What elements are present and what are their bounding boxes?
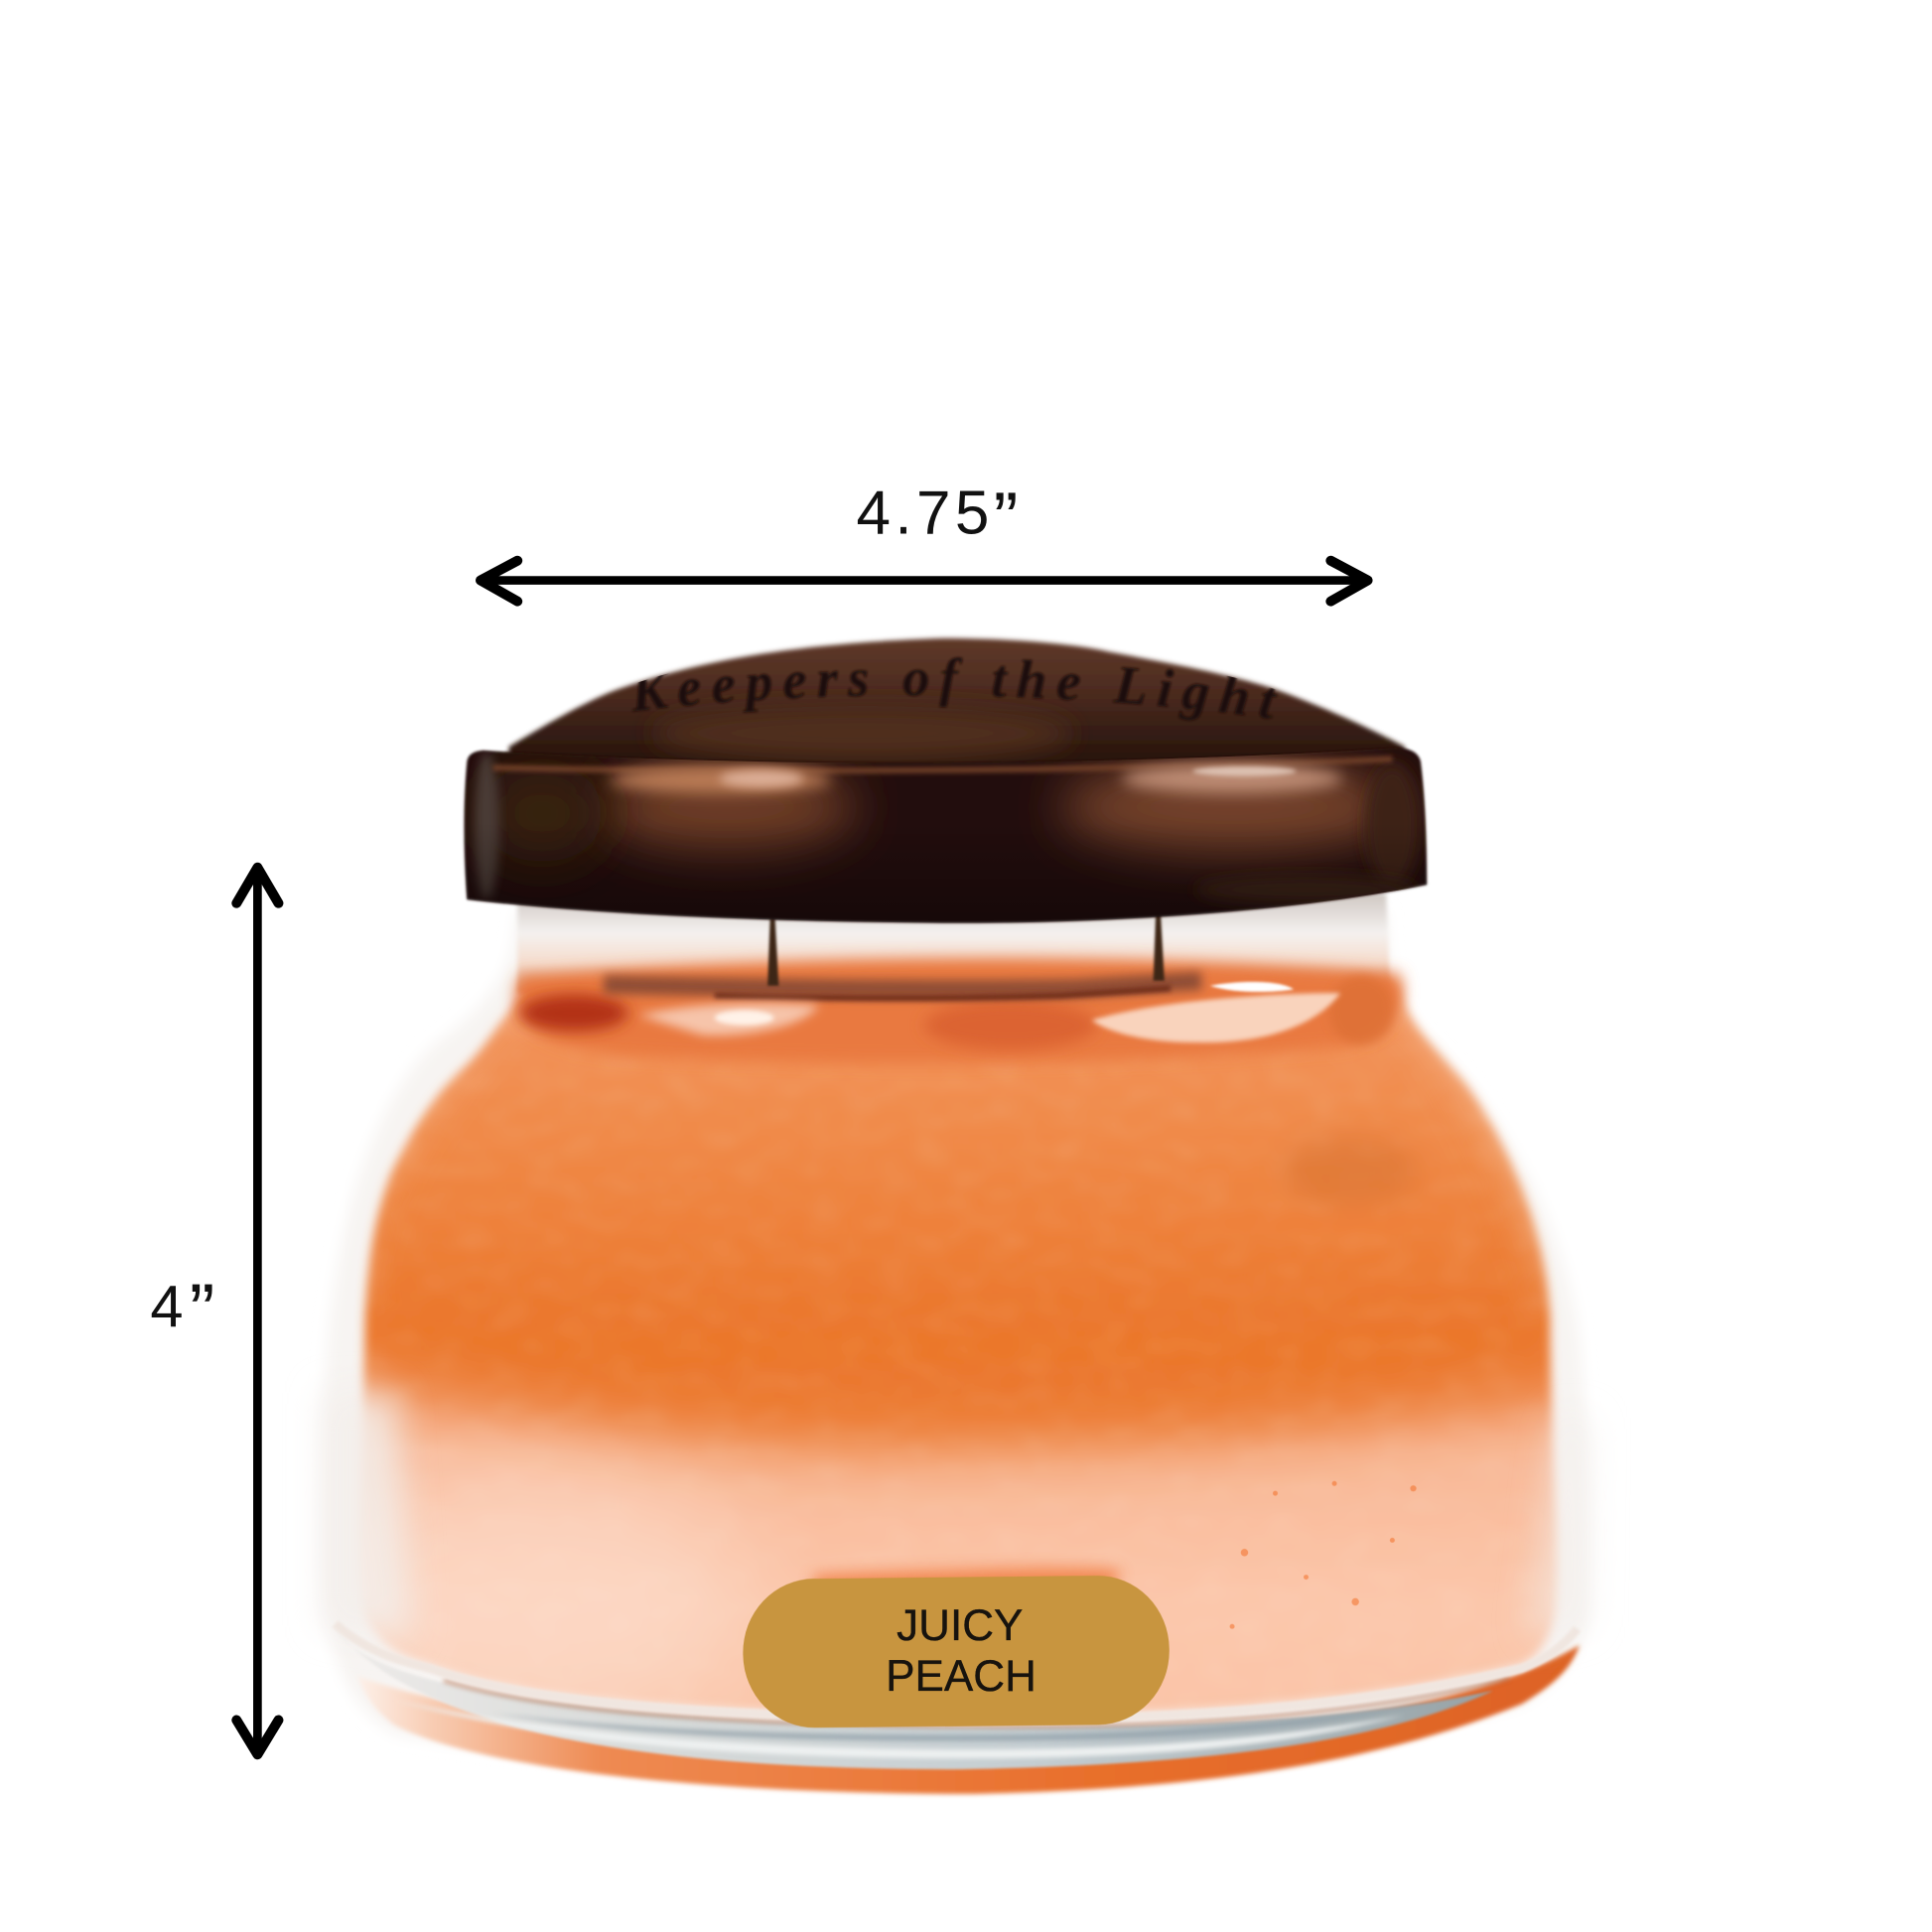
glass jar body — [323, 911, 1588, 1770]
rim top strip — [492, 759, 1392, 770]
height label: 4 — [150, 1274, 184, 1340]
darker wax lobes — [924, 1001, 1097, 1049]
orange base reflection — [357, 1645, 1580, 1794]
pale wax area on the left — [379, 1439, 759, 1703]
height label: ” — [190, 1269, 214, 1354]
glass neck — [517, 894, 1390, 993]
dark patch on wax — [1287, 1138, 1409, 1197]
candle jar — [308, 894, 1591, 1794]
width label: 4.75 — [857, 479, 994, 547]
wax: lower peach layer — [333, 1307, 1578, 1737]
glass base — [336, 1624, 1578, 1769]
pale glass sides — [323, 1392, 1591, 1639]
width label: ” — [994, 477, 1023, 559]
width dimension — [481, 477, 1368, 602]
wax: upper orange layer — [327, 973, 1589, 1449]
rim lower shade — [465, 844, 1427, 923]
wick right — [1154, 914, 1165, 981]
copper lid — [463, 634, 1430, 925]
product diagram: candle jar with dimensions — [151, 490, 1592, 1798]
wax top surface — [515, 958, 1403, 1063]
lid rim — [456, 740, 1442, 924]
candle label — [743, 1568, 1171, 1728]
melted red patch — [520, 995, 628, 1032]
width arrow — [481, 561, 1368, 602]
surface line — [604, 981, 1201, 989]
label text: JUICY — [897, 1601, 1023, 1650]
label text: PEACH — [886, 1652, 1036, 1701]
height arrow — [236, 868, 278, 1754]
wick left — [767, 918, 778, 986]
wax texture — [367, 1063, 1547, 1446]
lid dome — [504, 634, 1408, 764]
wax body — [355, 983, 1561, 1714]
rim highlights — [610, 766, 832, 793]
embossed lid lettering: Keepers of the Light — [631, 655, 1279, 722]
orange specks — [1230, 1481, 1417, 1629]
label text — [886, 1601, 1036, 1701]
height dimension — [150, 868, 278, 1754]
reflections — [638, 1003, 819, 1035]
rim brown sheen — [598, 762, 857, 852]
